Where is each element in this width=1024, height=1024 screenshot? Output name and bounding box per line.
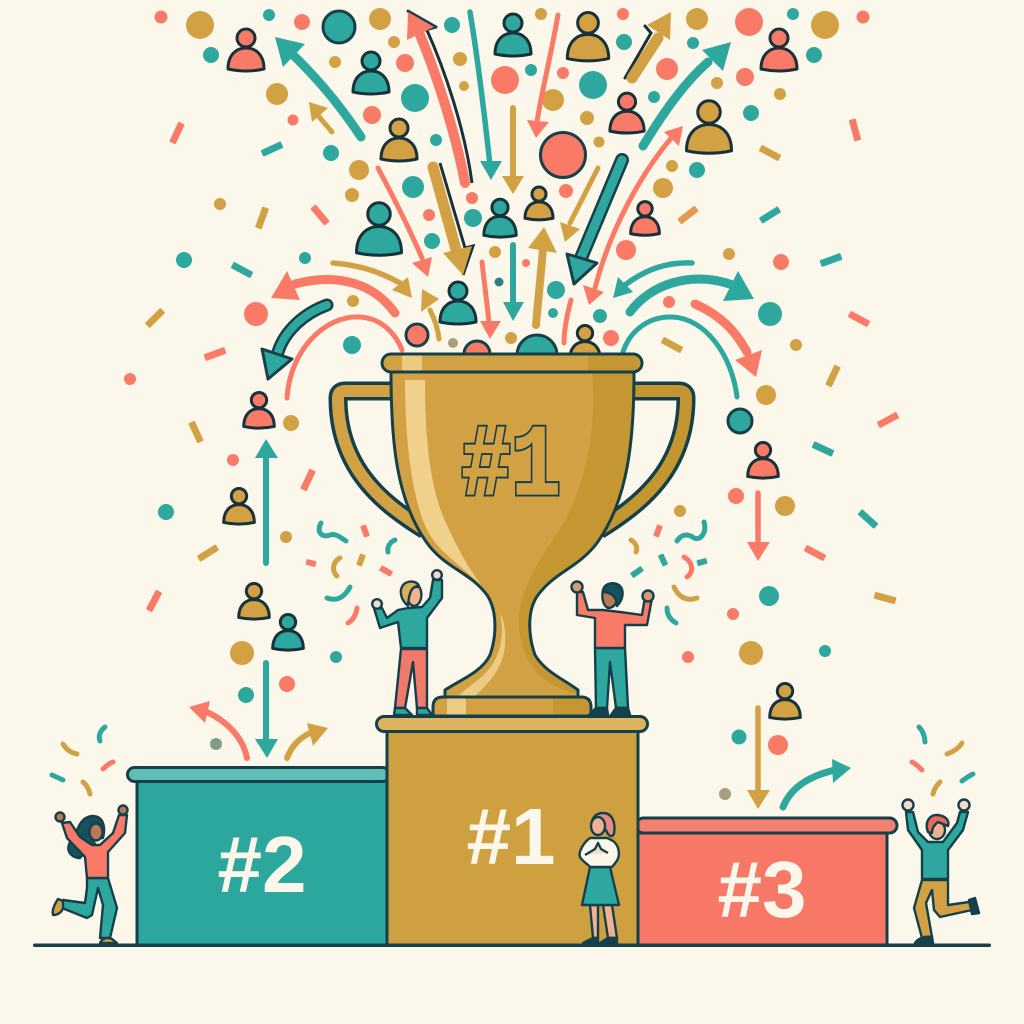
figure: woman clapping in front of first podium xyxy=(580,813,619,943)
confetti squiggles xyxy=(52,522,973,794)
label: #3: #3 xyxy=(718,845,806,934)
arrow: gold curved up-right xyxy=(287,723,328,758)
icon: person gold xyxy=(567,13,609,61)
ground line xyxy=(33,944,991,947)
trophy left highlight xyxy=(405,380,481,585)
figure: man cheering far right xyxy=(902,800,979,943)
trophy engraved number: #1 xyxy=(461,411,561,525)
icon: person teal large xyxy=(356,203,402,255)
label: #1: #1 xyxy=(467,792,555,881)
trophy engraved number: #1 xyxy=(461,411,561,525)
trophy stem highlight xyxy=(458,613,505,696)
arrow: teal outlined curved xyxy=(262,305,327,379)
icon: person teal xyxy=(484,199,516,237)
arrow: teal outlined down-left xyxy=(567,160,622,284)
arrow: teal arc xyxy=(623,317,737,397)
icon: person coral xyxy=(244,392,274,428)
icon: person gold in trophy cup xyxy=(570,325,600,361)
figure: woman cheering far left xyxy=(53,806,128,943)
icon: person teal xyxy=(440,282,476,324)
confetti bars xyxy=(145,118,899,612)
arrow: teal thin down xyxy=(470,12,502,180)
icon: person gold large xyxy=(686,101,732,153)
arrow: teal small arc left xyxy=(613,263,692,298)
arrow: small gold up xyxy=(421,289,439,339)
icon: person coral small xyxy=(631,202,659,235)
icon: teal dome in trophy cup xyxy=(517,335,557,375)
arrow: coral arc right xyxy=(695,304,762,377)
podium: third place xyxy=(636,818,897,945)
arrow: teal up left side xyxy=(255,439,278,563)
arrow: coral large up xyxy=(407,11,472,183)
trophy cup outline xyxy=(391,373,634,698)
arrow: gold up-right with dark edge xyxy=(625,12,671,78)
label: #2: #2 xyxy=(218,820,306,909)
arrow: teal curved right xyxy=(783,759,851,807)
icon: person gold xyxy=(381,119,417,161)
icon: person coral xyxy=(228,29,264,71)
figure: man cheering right of trophy xyxy=(572,582,654,715)
arrow: gold up xyxy=(528,227,557,325)
arrow: coral thin double headed xyxy=(583,126,683,305)
icon: person gold xyxy=(770,683,800,719)
icon: person teal xyxy=(495,14,531,56)
trophy rim xyxy=(382,354,642,372)
icon: person coral xyxy=(748,442,778,478)
arrow: gold down to third place xyxy=(747,708,770,809)
figure: man cheering left of trophy xyxy=(372,570,442,715)
icon: person gold small xyxy=(525,187,553,220)
arrow: gold arc right xyxy=(333,263,412,298)
arrow: coral curved up-left xyxy=(189,701,247,758)
podium: second place xyxy=(128,768,390,945)
trophy cup body xyxy=(391,373,634,698)
arrow: gold large down with dark edge xyxy=(433,163,473,275)
arrow: gold thin down-left xyxy=(560,168,598,242)
icon: person teal xyxy=(353,52,389,94)
arrow: teal up-left xyxy=(275,37,361,137)
trophy base xyxy=(433,697,591,716)
arrow: coral stroke xyxy=(564,300,571,343)
people icons xyxy=(224,13,800,719)
arrow: coral thin down-right xyxy=(378,168,432,277)
arrow: teal arc right xyxy=(630,271,754,312)
arrow: coral down right side xyxy=(747,493,770,561)
outlined dots xyxy=(323,11,752,433)
arrow: teal up-right xyxy=(643,42,731,146)
arrow: gold down xyxy=(502,108,524,194)
icon: person coral xyxy=(761,29,797,71)
arrow: coral thin down xyxy=(527,15,558,138)
podium: first place xyxy=(376,716,648,945)
arrow: small gold up-left xyxy=(309,102,332,132)
trophy xyxy=(338,354,686,716)
icon: person gold xyxy=(239,583,269,619)
icon: coral dome in trophy cup xyxy=(464,341,490,367)
arrow: teal down xyxy=(503,245,524,321)
trophy left handle xyxy=(338,391,425,530)
arrow: coral arc left xyxy=(271,271,395,313)
arrow: coral down xyxy=(480,262,501,339)
icon: person gold xyxy=(224,488,254,524)
arrows bursting from the trophy xyxy=(189,11,851,809)
arrow: teal down to second place xyxy=(255,663,278,758)
arrow: coral arc xyxy=(287,317,402,398)
icon: person coral xyxy=(610,93,644,133)
trophy right shade xyxy=(519,373,634,694)
icon: person teal xyxy=(273,614,303,650)
trophy right handle xyxy=(599,391,686,530)
confetti dots xyxy=(124,8,870,800)
